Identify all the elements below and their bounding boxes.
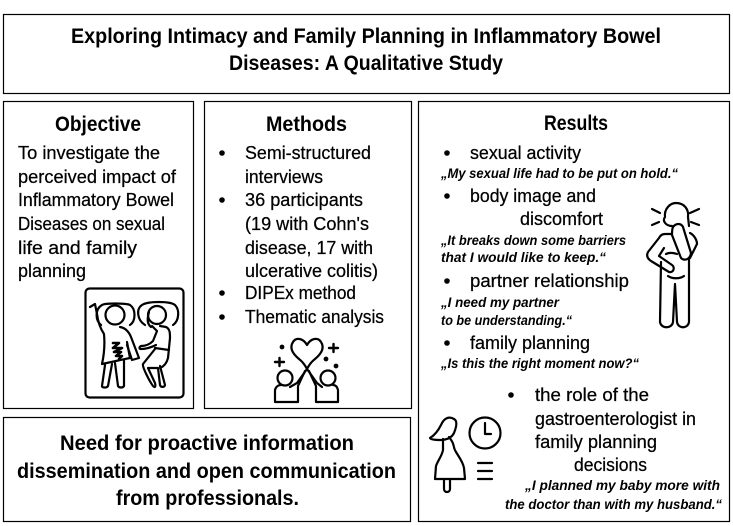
result: role of the gastroenterologist: the doctor than with my husband.“ (505, 497, 722, 512)
objective text: To investigate the (18, 142, 160, 163)
result: body image and discomfort (440, 185, 626, 265)
result: family planning: „Is this the right moment now?“ (440, 356, 639, 371)
result: partner relationship: to be understanding.“ (441, 313, 572, 328)
result: sexual activity (440, 142, 678, 181)
objective text: Diseases on sexual (18, 213, 165, 234)
objective text: Inflammatory Bowel (18, 189, 174, 210)
title panel (4, 14, 730, 94)
result: role of the gastroenterologist: decisions (574, 454, 647, 475)
methods list: 36 participants (245, 189, 363, 210)
panel: conclusion (4, 418, 410, 522)
result: sexual activity: „My sexual life had to be put on hold.“ (440, 166, 678, 181)
result: body image and discomfort: „It breaks down some barriers (440, 233, 626, 248)
objective text: perceived impact of (18, 166, 177, 187)
result: role of the gastroenterologist: the role of the (535, 384, 649, 405)
panel: conclusion: dissemination and open communication (17, 460, 396, 483)
methods list (219, 142, 384, 327)
panel: results (418, 102, 730, 522)
result: role of the gastroenterologist: family planning (535, 431, 657, 452)
icon: pregnant woman with clock (430, 418, 500, 492)
icon: couple in bed (86, 288, 184, 398)
methods list: ulcerative colitis) (245, 260, 378, 281)
methods heading: Methods (266, 113, 347, 136)
objective text (18, 142, 177, 281)
result: role of the gastroenterologist (505, 384, 722, 512)
icon: person touching face and holding stomach (647, 203, 699, 327)
icon: heart and two people (275, 339, 338, 402)
objective heading: Objective (55, 113, 141, 136)
result: partner relationship: partner relationship (470, 270, 629, 291)
methods list: DIPEx method (245, 282, 356, 303)
methods list: disease, 17 with (245, 237, 373, 258)
objective text: life and family (18, 237, 138, 258)
results heading: Results (544, 112, 608, 135)
methods list: Thematic analysis (245, 306, 384, 327)
result: body image and discomfort: discomfort (520, 208, 603, 229)
result: sexual activity: sexual activity (470, 142, 582, 163)
result: role of the gastroenterologist: gastroenterologist in (535, 408, 696, 429)
methods list: interviews (245, 166, 323, 187)
result: body image and discomfort: that I would like to keep.“ (441, 250, 606, 265)
title panel: Diseases: A Qualitative Study (229, 52, 503, 75)
methods list: Semi-structured (245, 142, 371, 163)
result: partner relationship: „I need my partner (440, 295, 560, 310)
title panel: Exploring Intimacy and Family Planning in Inflammatory Bowel (71, 25, 661, 48)
objective text: planning (18, 260, 86, 281)
panel: methods (204, 102, 412, 408)
methods list: (19 with Cohn's (245, 213, 369, 234)
panel: conclusion: from professionals. (116, 487, 299, 510)
result: family planning: family planning (470, 332, 590, 353)
result: family planning (440, 332, 639, 371)
panel: conclusion: Need for proactive information (60, 432, 354, 455)
result: partner relationship (440, 270, 629, 328)
panel: objective (4, 102, 194, 408)
result: role of the gastroenterologist: „I planned my baby more with (524, 478, 720, 493)
result: body image and discomfort: body image and (470, 185, 596, 206)
